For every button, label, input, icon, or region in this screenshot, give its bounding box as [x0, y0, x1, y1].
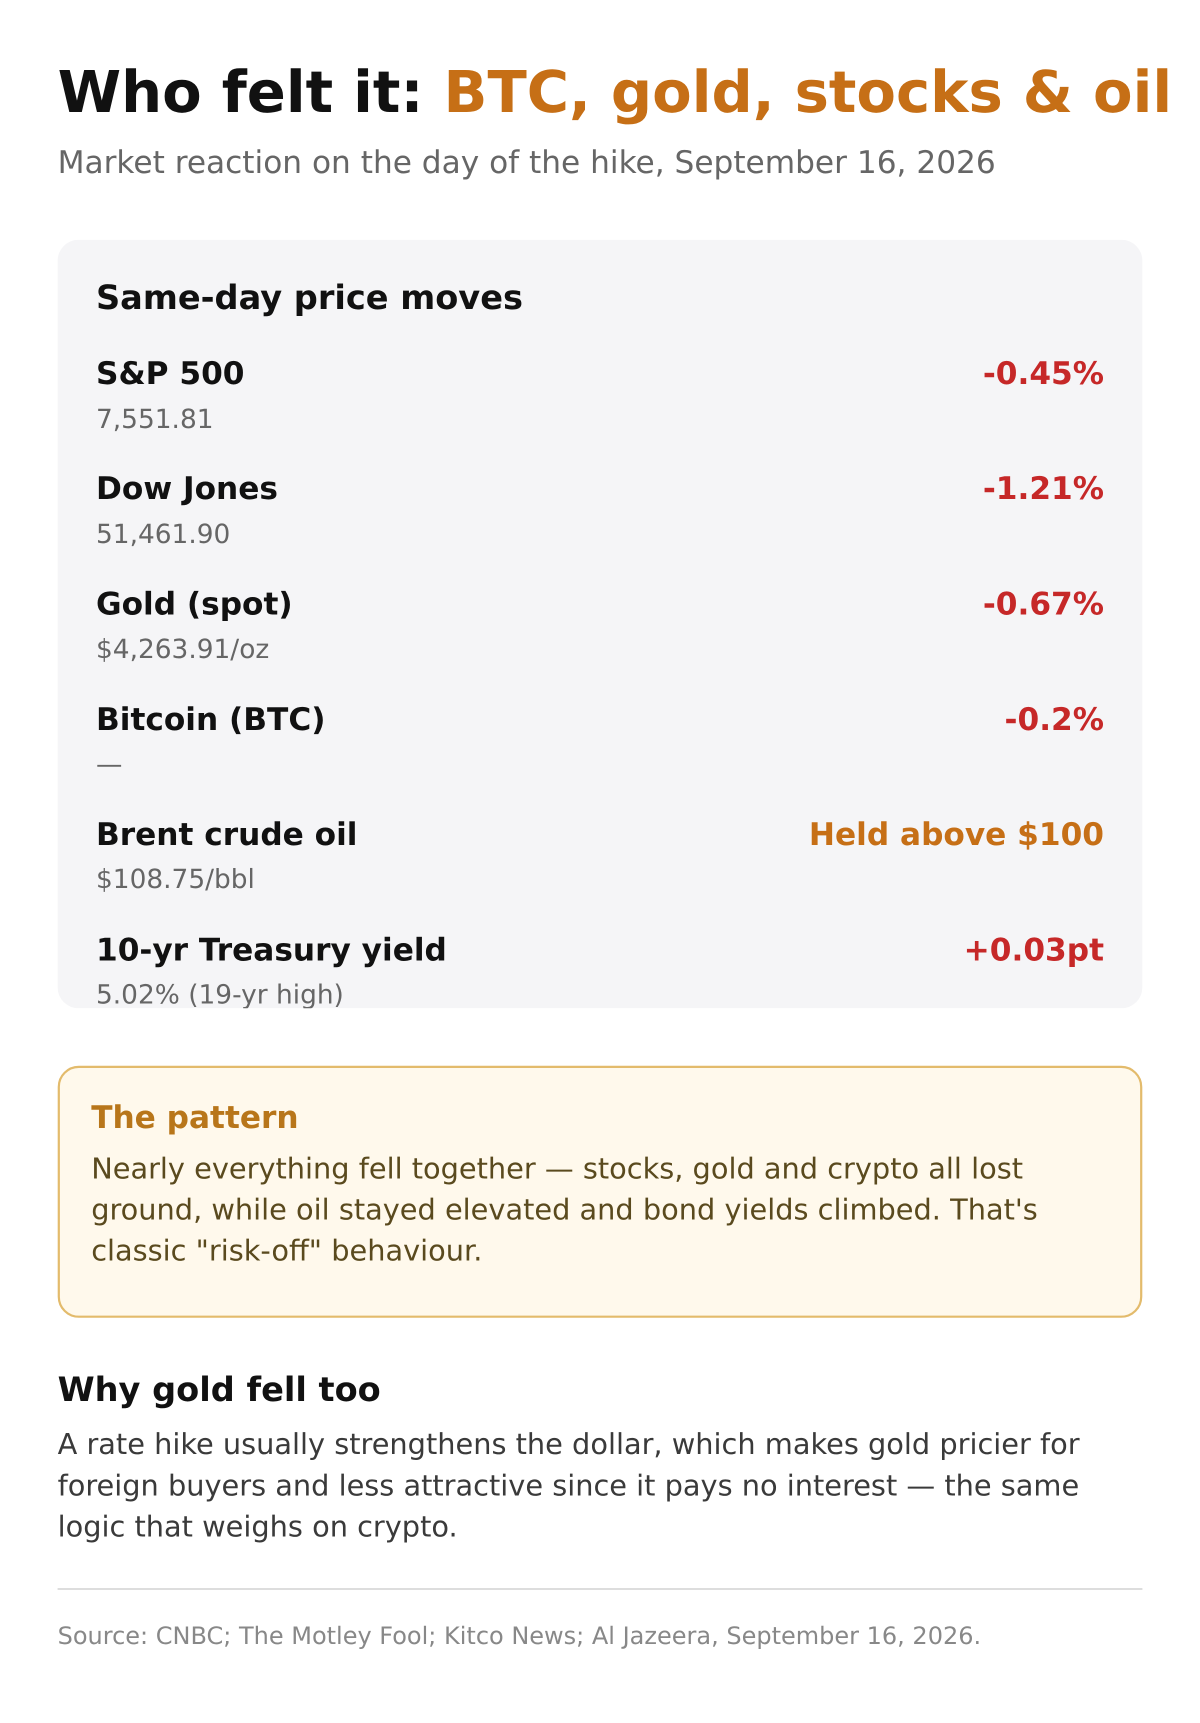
row: Brent crude oil: Brent crude oil	[96, 817, 358, 853]
section body: foreign buyers and less attractive since it pays no interest — the same	[58, 1469, 1079, 1503]
callout body	[91, 1152, 1038, 1267]
row: S&P 500: 7,551.81	[96, 404, 214, 435]
row: Dow Jones	[98, 476, 1103, 546]
panel heading: Same-day price moves	[96, 278, 523, 317]
row: Dow Jones: -1.21%	[983, 471, 1104, 507]
title: Who felt it: BTC, gold, stocks & oil	[58, 59, 1172, 126]
callout body: Nearly everything fell together — stocks, gold and crypto all lost	[91, 1152, 1023, 1186]
row: Gold	[96, 587, 1104, 665]
row: Gold: -0.67%	[983, 587, 1104, 623]
row: Bitcoin	[97, 706, 1103, 767]
panel: same-day price moves	[58, 240, 1142, 1010]
source note: Source: CNBC; The Motley Fool; Kitco News; Al Jazeera, September 16, 2026.	[58, 1622, 981, 1650]
section heading: why gold fell too: Why gold fell too	[58, 1370, 381, 1409]
row: Dow Jones: 51,461.90	[96, 519, 230, 550]
row: 10-yr Treasury yield	[96, 932, 1104, 1010]
row: S&P 500	[98, 360, 1103, 432]
callout body: ground, while oil stayed elevated and bond yields climbed. That's	[91, 1193, 1038, 1227]
callout body: classic "risk-off" behaviour.	[91, 1233, 482, 1267]
row: Bitcoin: —	[96, 749, 122, 780]
row: 10-yr Treasury yield: 5.02% (19-yr high)	[96, 979, 344, 1010]
section body: logic that weighs on crypto.	[58, 1509, 458, 1543]
row: S&P 500: S&P 500	[96, 356, 244, 392]
row: Dow Jones: Dow Jones	[96, 471, 278, 507]
section body: A rate hike usually strengthens the dollar, which makes gold pricier for	[58, 1427, 1080, 1461]
section body	[58, 1427, 1080, 1543]
row: Bitcoin: -0.2%	[1005, 702, 1104, 738]
row: Brent crude oil	[96, 817, 1104, 895]
row: Gold: Gold (spot)	[96, 587, 293, 623]
row: S&P 500: -0.45%	[983, 356, 1104, 392]
row: Brent crude oil: $108.75/bbl	[96, 864, 255, 895]
row: Gold: $4,263.91/oz	[96, 634, 269, 665]
row: Brent crude oil: Held above $100	[809, 817, 1104, 853]
subtitle: Market reaction on the day of the hike, September 16, 2026	[58, 145, 996, 181]
row: Bitcoin: Bitcoin (BTC)	[96, 702, 325, 738]
row: 10-yr Treasury yield: +0.03pt	[964, 932, 1104, 968]
row: 10-yr Treasury yield: 10-yr Treasury yield	[96, 932, 447, 968]
callout heading: The pattern	[91, 1100, 299, 1136]
callout: the pattern	[59, 1067, 1141, 1317]
